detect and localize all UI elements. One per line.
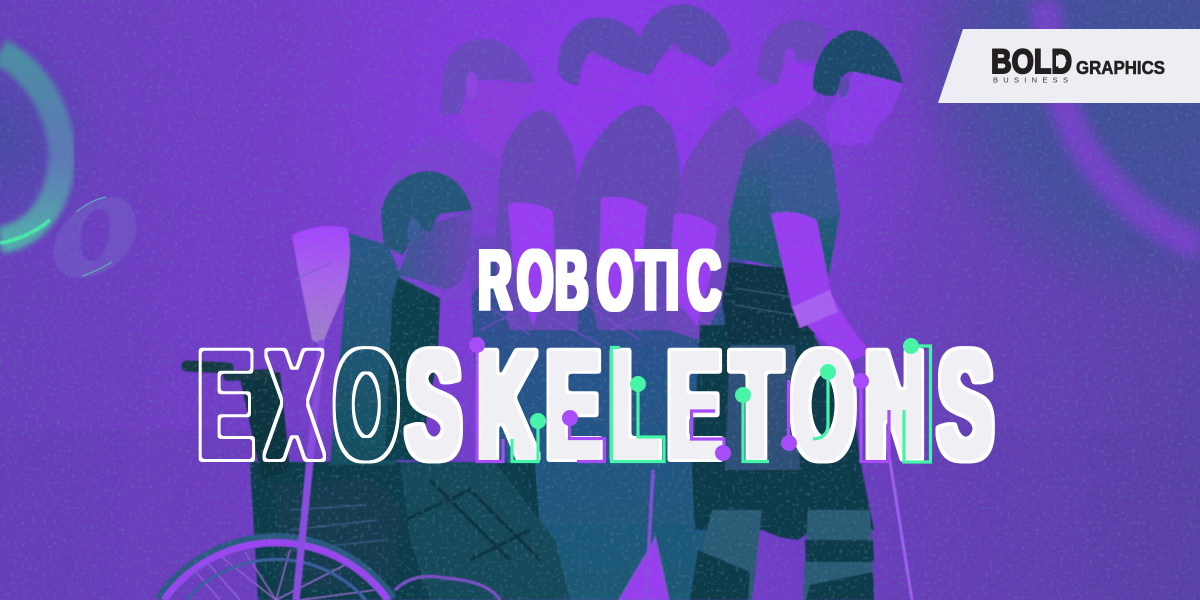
seated figure — [292, 171, 472, 465]
ghost figure 2 — [496, 17, 649, 330]
ghost figure 4 — [668, 20, 828, 340]
logo word GRAPHICS: GRAPHICS — [1076, 57, 1165, 78]
crutch pole seated — [296, 340, 322, 600]
accent: purple circuit lines — [477, 345, 889, 462]
chair frame details — [395, 576, 500, 600]
arc: left teal ring — [0, 52, 62, 243]
logo badge — [938, 29, 1200, 103]
arm — [771, 212, 872, 362]
accent: green circuit lines — [512, 346, 930, 462]
final standing figure — [690, 31, 903, 600]
logo wordmark BOLD: BOLD — [991, 43, 1072, 81]
ghost crutch and gap — [620, 470, 668, 600]
shirt — [728, 118, 840, 278]
lower ghost mass — [468, 235, 745, 600]
legs — [692, 325, 874, 540]
wheelchair handles — [187, 366, 228, 368]
heading: ROBOTIC: ROBOTIC — [478, 234, 721, 328]
heading: EXOSKELETONS — [198, 321, 993, 491]
heading word: solid SKELETONS: SKELETONS — [406, 321, 993, 491]
mesh lines — [480, 285, 720, 345]
accent: green dots — [530, 338, 919, 429]
wheel — [161, 540, 391, 600]
ghost figure 3 — [574, 4, 731, 330]
figure sequence — [161, 4, 912, 600]
belt — [722, 262, 820, 345]
head — [825, 71, 903, 146]
heading word: outlined EXO: EXO — [198, 321, 399, 491]
accent: purple dots — [469, 337, 869, 461]
arc: right background swoosh — [1045, 0, 1200, 247]
ghost figure 1 — [360, 39, 534, 300]
icon: logo play triangle — [1056, 55, 1067, 67]
logo word BUSINESS: BUSINESS — [993, 76, 1068, 84]
icon: translucent small ring — [53, 197, 136, 278]
wheelchair and seated legs — [187, 366, 570, 600]
chair back — [240, 372, 290, 480]
crutch pole standing — [872, 348, 912, 600]
